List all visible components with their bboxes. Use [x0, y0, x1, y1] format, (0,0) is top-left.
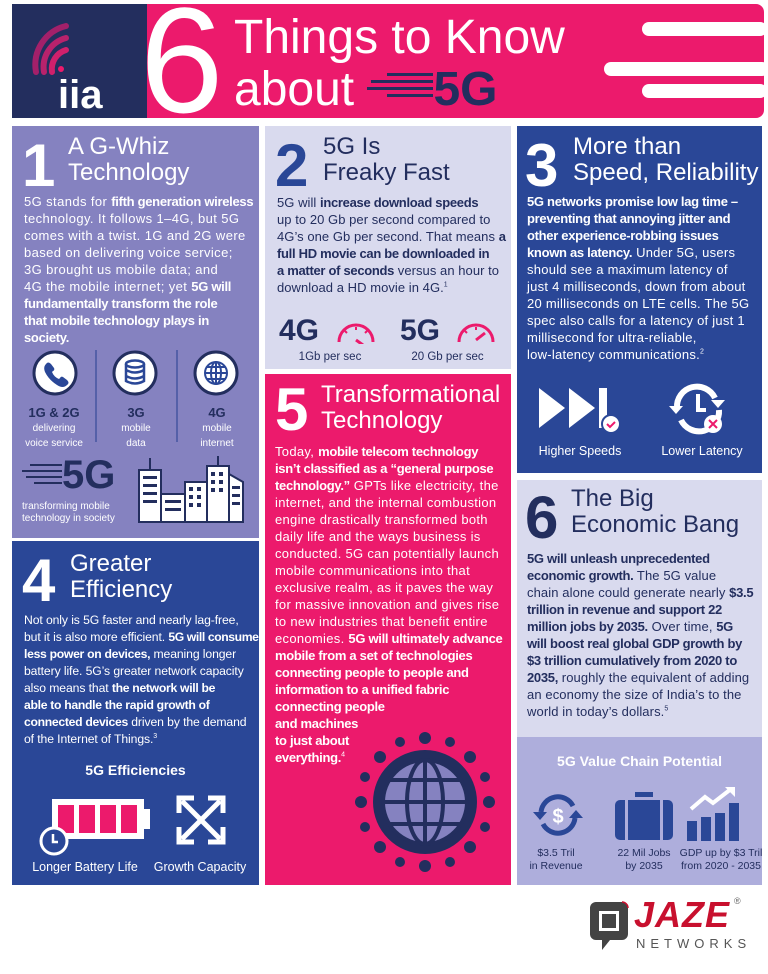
generations icons: delivering	[33, 423, 75, 434]
panel 4 text: but it is also more efficient. 5G will consume	[24, 630, 259, 644]
icon: city	[138, 456, 244, 523]
value chain box: GDP up by $3 Tril	[680, 847, 762, 859]
icon: higher speeds	[539, 388, 619, 432]
panel 3 heading: Speed, Reliability	[573, 159, 758, 186]
panel 5 text: economies. 5G will ultimately advance	[275, 631, 502, 646]
panel 4 text	[24, 613, 259, 746]
panel 4 text: connected devices driven by the demand	[24, 715, 246, 729]
value chain box: $3.5 Tril	[537, 847, 575, 859]
panel 4 text: Not only is 5G faster and nearly lag-free,	[24, 613, 239, 627]
panel 6 text: economic growth. The 5G value	[527, 568, 716, 583]
panel 5 text: technology.” GPTs like electricity, the	[275, 478, 499, 493]
panel 5 text: for massive innovation and gives rise	[275, 597, 499, 612]
panel 6 heading: Economic Bang	[571, 511, 739, 538]
title text: Things to Know	[234, 11, 565, 64]
panel 3 heading: More than	[573, 133, 681, 160]
panel 2 heading: 5G Is	[323, 133, 380, 160]
panel 6 text: chain alone could generate nearly $3.5	[527, 585, 753, 600]
panel 6 text: trillion in revenue and support 22	[527, 602, 722, 617]
panel 1 text: technology. It follows 1–4G, but 5G	[24, 211, 239, 226]
5G efficiencies: Growth Capacity	[154, 860, 246, 874]
logo: iia	[32, 23, 103, 111]
panel 1 text: 3G brought us mobile data; and	[24, 262, 218, 277]
logo: JAZE Networks	[590, 894, 751, 951]
icon: lower latency	[669, 384, 725, 434]
5G society	[22, 453, 115, 524]
icon: globe	[194, 350, 238, 396]
panel 5 text: mobile communications into that	[275, 563, 470, 578]
5G society: transforming mobile	[22, 501, 110, 512]
generations icons	[25, 350, 238, 449]
generations icons: 3G	[127, 405, 145, 420]
panel 3 text: spec also calls for a latency of just 1	[527, 313, 745, 328]
logo: JAZE Networks: ®	[734, 896, 741, 906]
panel 2 text: a matter of seconds versus an hour to	[277, 263, 499, 278]
panel 3 heading	[525, 132, 758, 199]
5G society: technology in society	[22, 513, 115, 524]
icon: dollar cycle: $	[552, 806, 564, 828]
panel 6 text	[527, 551, 754, 719]
generations icons: mobile	[121, 423, 151, 434]
panel 5 text: to just about	[275, 733, 349, 748]
icon: briefcase	[615, 792, 673, 840]
panel 5 text: everything.4	[275, 750, 345, 765]
panel 5 text: engine drastically transformed both	[275, 512, 488, 527]
value chain box	[517, 737, 762, 885]
panel 4 text: able to handle the rapid growth of	[24, 698, 209, 712]
icon: battery	[40, 799, 150, 856]
value chain box: from 2020 - 2035	[681, 860, 761, 872]
panel 2 text	[277, 195, 506, 295]
panel 6 text: 5G will unleash unprecedented	[527, 551, 710, 566]
panel 1 text: 4G the mobile internet; yet 5G will	[24, 279, 231, 294]
panel 6 text: 2035, roughly the equivalent of adding	[527, 670, 749, 685]
panel 4 text: also means that the network will be	[24, 681, 215, 695]
panel 3 text: just 4 milliseconds, down from about	[527, 279, 746, 294]
panel 2 text: 4G’s one Gb per second. That means a	[277, 229, 506, 244]
header pink block	[147, 4, 764, 118]
panel 5 heading: 5	[275, 376, 308, 443]
panel 6	[517, 480, 762, 885]
5G efficiencies: Longer Battery Life	[32, 860, 138, 874]
speed comparison: 20 Gb per sec	[411, 351, 484, 363]
panel 1 text: society.	[24, 330, 69, 345]
panel 3 text: other experience-robbing issues	[527, 228, 719, 243]
panel 1 heading	[22, 132, 190, 199]
panel 3 heading: 3	[525, 132, 558, 199]
panel 2 text: full HD movie can be downloaded in	[277, 246, 489, 261]
panel 6 text: world in today’s dollars.5	[527, 704, 668, 719]
panel 1 heading: 1	[22, 132, 55, 199]
logo: JAZE Networks: JAZE	[634, 894, 730, 935]
panel 5 heading: Transformational	[321, 381, 500, 408]
panel 1 text: based on delivering voice service;	[24, 245, 233, 260]
panel 5 text: isn’t classified as a “general purpose	[275, 461, 493, 476]
panel 6 text: an economy the size of India’s to the	[527, 687, 741, 702]
panel 4 heading	[22, 547, 172, 614]
panel 1 text: that mobile technology plays in	[24, 313, 209, 328]
icon: dollar cycle	[533, 794, 583, 836]
panel 5 text: connecting people to people and	[275, 665, 469, 680]
panel 5 text: Today, mobile telecom technology	[275, 444, 478, 459]
panel 3	[517, 126, 762, 473]
panel 5 text: information to a unified fabric	[275, 682, 449, 697]
icon: expand arrows	[176, 796, 226, 844]
panel 5 text: exclusive realm, as it paves the way	[275, 580, 493, 595]
panel 5 heading	[275, 376, 500, 443]
icon: phone	[32, 350, 78, 396]
panel 5 text: and machines	[275, 716, 358, 731]
panel 2 text: up to 20 Gb per second compared to	[277, 212, 490, 227]
panel 2 heading	[275, 132, 450, 199]
panel 6 heading: 6	[525, 484, 558, 551]
panel 5 text: to new industries that benefit entire	[275, 614, 488, 629]
5G society: 5G	[62, 453, 115, 497]
panel 6 text: $3 trillion cumulatively from 2020 to	[527, 653, 737, 668]
header banner	[12, 0, 764, 144]
panel 4 text: battery life. 5G’s greater network capacity	[24, 664, 244, 678]
panel 4 text: of the Internet of Things.3	[24, 732, 157, 746]
panel 4 heading: Efficiency	[70, 576, 172, 603]
logo: JAZE Networks: NETWORKS	[636, 936, 751, 951]
panel 6 heading	[525, 484, 739, 551]
generations icons: 4G	[208, 405, 226, 420]
panel 2 heading: Freaky Fast	[323, 159, 450, 186]
panel 3 text: low-latency communications.2	[527, 347, 704, 362]
panel 2 heading: 2	[275, 132, 308, 199]
panel 1 text: comes with a twist. 1G and 2G were	[24, 228, 246, 243]
panel 5 heading: Technology	[321, 407, 442, 434]
5G efficiencies: 5G Efficiencies	[85, 762, 186, 778]
panel 4 heading: 4	[22, 547, 55, 614]
panel 5 text: connecting people	[275, 699, 385, 714]
panel 3 text: 5G networks promise low lag time –	[527, 194, 738, 209]
generations icons: 1G & 2G	[28, 405, 80, 420]
panel 1 text	[24, 194, 254, 345]
generations icons: mobile	[202, 423, 232, 434]
panel 5 text: internet, and the internal combustion	[275, 495, 496, 510]
icon: globe with people	[355, 732, 495, 872]
value chain box: 5G Value Chain Potential	[557, 753, 722, 769]
generations icons: data	[126, 438, 146, 449]
panel 2 text: download a HD movie in 4G.1	[277, 280, 448, 295]
panel 3: Higher Speeds	[539, 444, 621, 458]
panel 1 heading: A G-Whiz	[68, 133, 169, 160]
panel 6 heading: The Big	[571, 485, 654, 512]
panel 3 text: known as latency. Under 5G, users	[527, 245, 735, 260]
value chain box: by 2035	[625, 860, 663, 872]
speed comparison: 5G	[400, 314, 440, 347]
5G efficiencies	[32, 762, 246, 874]
speed comparison	[279, 314, 494, 363]
icon: database	[112, 350, 158, 396]
panel 5	[265, 374, 511, 885]
speed comparison: 4G	[279, 314, 319, 347]
panel 1 heading: Technology	[68, 159, 189, 186]
speed lines	[604, 22, 764, 98]
header navy block	[12, 4, 202, 118]
panel 2 text: 5G will increase download speeds	[277, 195, 478, 210]
title text: about 5G	[234, 63, 497, 116]
panel 1	[12, 126, 259, 538]
panel 4 text: less power on devices, meaning longer	[24, 647, 236, 661]
panel 5 text	[275, 444, 502, 765]
panel 3 text: should see a maximum latency of	[527, 262, 728, 277]
generations icons: voice service	[25, 438, 83, 449]
icon: growth chart	[687, 787, 739, 841]
panel 5 text: mobile from a set of technologies	[275, 648, 472, 663]
panel 5 text: daily life and the ways business is	[275, 529, 481, 544]
panel 3 text: 20 milliseconds on LTE cells. The 5G	[527, 296, 749, 311]
value chain box: in Revenue	[529, 860, 583, 872]
panel 1 text: 5G stands for fifth generation wireless	[24, 194, 253, 209]
panel 3 text	[526, 194, 749, 362]
panel 4 heading: Greater	[70, 550, 151, 577]
panel 6 text: million jobs by 2035. Over time, 5G	[527, 619, 733, 634]
panel 6 text: will boost real global GDP growth by	[527, 636, 742, 651]
panel 3 text: preventing that annoying jitter and	[527, 211, 730, 226]
title text	[234, 11, 565, 116]
panel 4	[12, 541, 259, 885]
panel 3: Lower Latency	[661, 444, 743, 458]
panel 5 text: conducted. 5G can potentially launch	[275, 546, 499, 561]
panel 3 text: millisecond for ultra-reliable,	[527, 330, 697, 345]
panel 2	[265, 126, 511, 369]
speed comparison: 1Gb per sec	[299, 351, 361, 363]
generations icons: internet	[200, 438, 234, 449]
panel 1 text: fundamentally transform the role	[24, 296, 217, 311]
value chain box: 22 Mil Jobs	[617, 847, 671, 859]
